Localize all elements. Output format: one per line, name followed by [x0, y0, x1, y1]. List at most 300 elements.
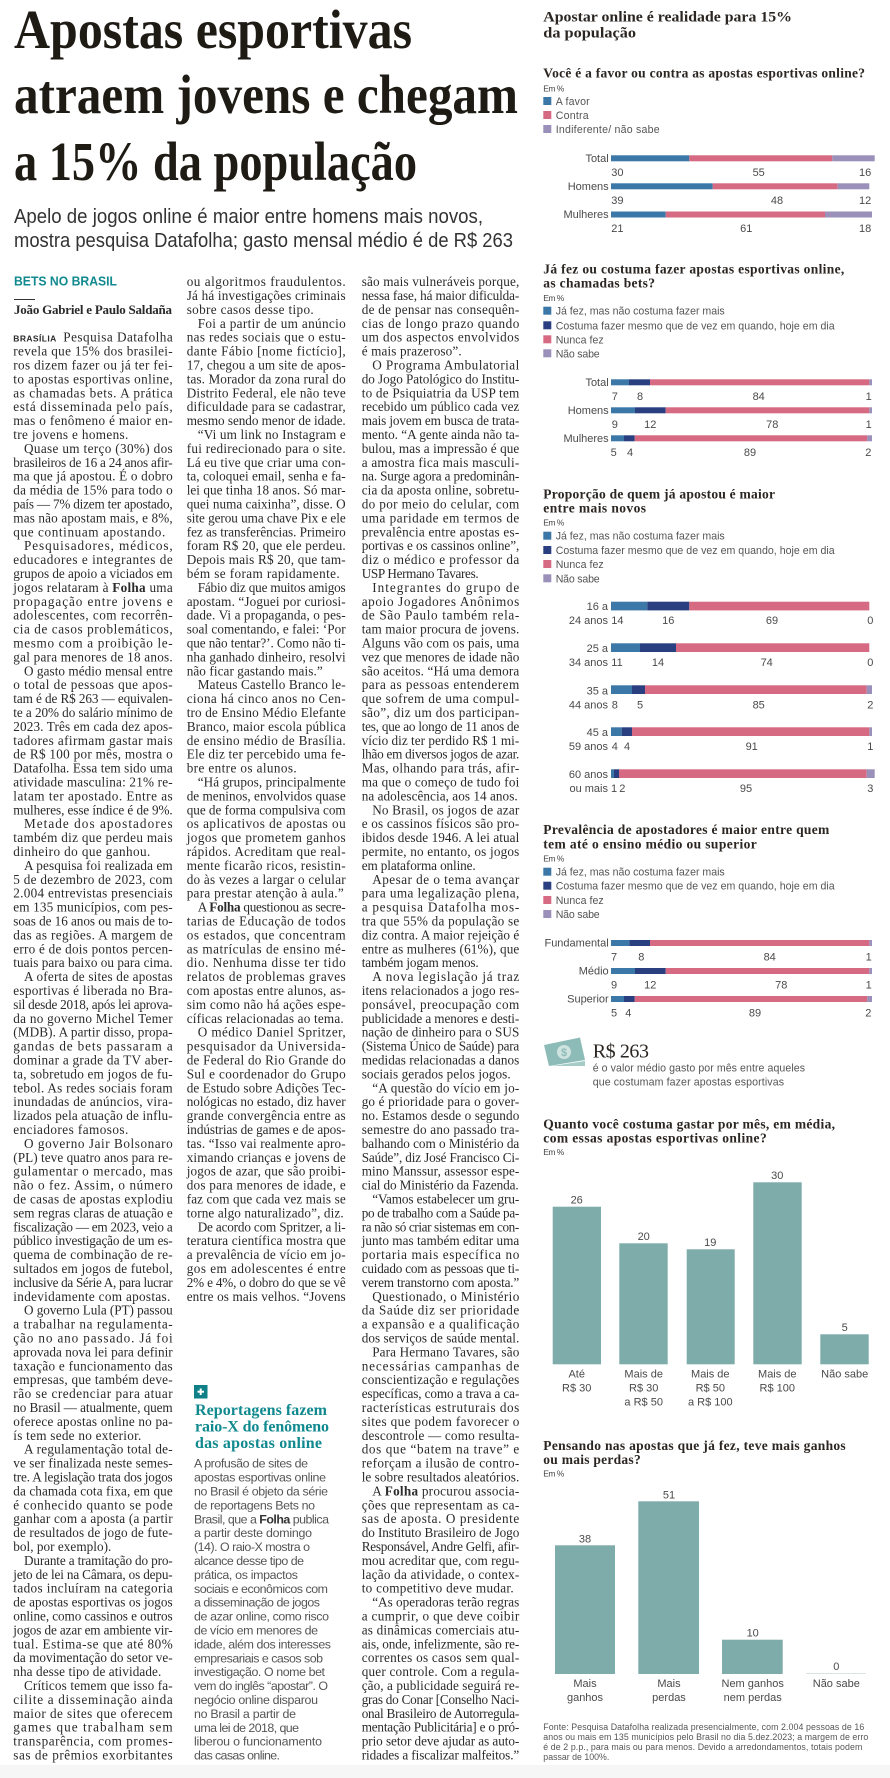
chart heading: Você é a favor ou contra as apostas esportivas online?	[543, 66, 865, 81]
stacked bars: 60 anos	[569, 769, 608, 781]
stacked bars: 48	[771, 195, 783, 207]
box text: das casas online.	[194, 1749, 280, 1763]
chart heading: Proporção de quem já apostou é maior	[543, 486, 775, 501]
article column 2: não ficar gastando mais.”	[187, 663, 323, 678]
article column 2: ximando crianças e jovens de	[187, 1150, 346, 1165]
article column 3: Integrantes do grupo de	[372, 580, 519, 595]
legend	[543, 867, 835, 921]
source note: anos ou mais em 135 municípios pelo Brasil no dia 5.dez.2023; a margem de erro	[543, 1732, 868, 1742]
article column 2: Mateus Castello Branco le-	[198, 677, 346, 692]
stacked bars: 7	[611, 952, 617, 964]
article column 2: de meninos, envolvidos quase	[187, 788, 346, 803]
article column 3: Saúde”, diz José Francisco Ci-	[362, 1150, 519, 1165]
icon: plus square	[194, 1385, 208, 1398]
article column 3: ções que representam as ca-	[362, 1497, 519, 1512]
article column 3: uma paridade em termos de	[362, 510, 519, 525]
article column 2: mente ficarão ricos, resistin-	[187, 858, 346, 873]
article column 3: tam maior procura de jovens.	[362, 622, 519, 637]
box text	[194, 1457, 331, 1763]
stacked bars: 12	[859, 195, 871, 207]
byline: João Gabriel e Paulo Saldaña	[14, 302, 172, 317]
article column 3: No Brasil, os jogos de azar	[372, 802, 520, 817]
legend: Costuma fazer mesmo que de vez em quando, hoje em dia	[556, 881, 835, 893]
article column 3: po de trabalho com a Saúde pa-	[362, 1205, 519, 1220]
article column 3: ra não só criar sistemas em con-	[362, 1219, 519, 1234]
stacked bars: 30	[611, 167, 624, 179]
article column 3: gras do Conar [Conselho Naci-	[362, 1692, 519, 1707]
article column 2: sim como não há ações espe-	[187, 997, 346, 1012]
box text: liberou o funcionamento	[194, 1735, 322, 1749]
box text: negócio online disparou	[194, 1693, 318, 1707]
chart heading	[543, 1116, 835, 1145]
article column 2: “Há grupos, principalmente	[198, 774, 346, 790]
column bars: 30	[771, 1170, 783, 1182]
article column 1: gandas de bets passaram a	[13, 1039, 173, 1054]
axis labels: ganhos	[567, 1692, 604, 1704]
article column 1: Metade dos apostadores	[24, 816, 173, 831]
article column 3: racterísticas estruturais dos	[362, 1400, 519, 1415]
article column 3: mentação Publicitária] e o pró-	[362, 1720, 519, 1735]
stacked bars: 78	[775, 980, 787, 992]
article column 1: da chamada cota fixa, em que	[13, 1483, 173, 1498]
article column 3: também jogam menos.	[362, 955, 479, 970]
article column 3: em plataforma online.	[362, 858, 476, 873]
article column 1: Pesquisadores, médicos,	[24, 538, 173, 553]
article column 3: a expansão e a qualificação	[362, 1317, 520, 1332]
article column 2: bre entre os alunos.	[187, 761, 297, 776]
article column 3: descontrole — como resulta-	[362, 1428, 519, 1443]
axis labels: R$ 30	[629, 1383, 658, 1395]
article column 3: portivas e os cassinos online”,	[362, 538, 519, 553]
article column 1: gulamentar o mercado, mas	[13, 1164, 173, 1179]
article column 3: dos serviços de saúde mental.	[362, 1330, 519, 1346]
article column 1: em 135 municípios, com pes-	[13, 900, 173, 915]
article column 2: rápidos. Acreditam que real-	[187, 844, 346, 859]
article column 1: país — 7% dizem ter apostado,	[13, 496, 173, 512]
article column 1: jogos de azar em ambiente vir-	[12, 1622, 173, 1637]
stacked bars	[563, 153, 875, 235]
article column 3: A nova legislação já traz	[372, 969, 519, 984]
article column 1: sil desde 2018, após lei aprova-	[13, 997, 173, 1012]
article column 3: onal Brasileiro de Autorregula-	[362, 1706, 519, 1721]
title: a 15% da população	[14, 131, 417, 192]
article column 1: tuais para baixo ou para cima.	[13, 955, 173, 970]
article column 3: publicidade a menores e desti-	[362, 1011, 519, 1026]
article column 3: mento. “A gente ainda não ta-	[362, 427, 519, 442]
article column 1: latam ter apostado. Entre as	[13, 788, 173, 803]
article column 1: de apostas esportivas os jogos	[13, 1595, 173, 1610]
legend: Contra	[556, 110, 589, 122]
article column 1: de R$ 100 por mês, mostra o	[13, 747, 173, 762]
article column 2: ou algoritmos fraudulentos.	[187, 274, 346, 289]
article column 3: cia da aposta online, sobretu-	[362, 483, 519, 498]
legend: Costuma fazer mesmo que de vez em quando, hoje em dia	[556, 320, 835, 332]
axis labels: R$ 30	[562, 1383, 591, 1395]
subtitle: mostra pesquisa Datafolha; gasto mensal médio é de R$ 263	[14, 230, 513, 252]
stacked bars: 2	[619, 783, 625, 795]
article column 3: bulou, mas a impressão é que	[362, 441, 519, 456]
article column 2: nológicas no estado, diz haver	[187, 1094, 346, 1109]
article column 3: reforçam a ilusão de contro-	[362, 1456, 519, 1471]
box text: de vício em menores de	[194, 1624, 318, 1638]
article column 1: O gasto médio mensal entre	[24, 663, 173, 678]
article column 1: online, como cassinos e outros	[13, 1608, 173, 1624]
stacked bars: Homens	[568, 405, 609, 417]
article column 2: O médico Daniel Spritzer,	[198, 1025, 346, 1040]
article column 2: fui redirecionado para o site.	[187, 441, 346, 456]
stacked bars: 24 anos	[569, 615, 608, 627]
chart: a favor ou contra	[543, 66, 875, 235]
article column 3: lação da atividade, o contex-	[362, 1567, 519, 1582]
article column 2: jogos que prometem ganhos	[186, 830, 346, 845]
stacked bars	[544, 938, 872, 1020]
article column 1: ta, sobretudo em jogos de fu-	[13, 1066, 173, 1081]
article column 3: “As operadoras terão regras	[372, 1595, 519, 1610]
article column 2: soal comentando, e falei: ‘Por	[187, 622, 346, 637]
article column 1: dominar a grade da TV aber-	[13, 1052, 173, 1068]
stacked bars: Homens	[568, 181, 609, 193]
article column 3: ais, onde, infelizmente, são re-	[362, 1636, 519, 1651]
stacked bars: 74	[761, 657, 773, 669]
article column 1: oferece apostas online no pa-	[13, 1414, 173, 1429]
article column 2: Já há investigações criminais	[187, 288, 346, 303]
column bars	[555, 1489, 866, 1674]
article column 3: são aceitos. “Há uma demora	[362, 663, 519, 678]
article column 1: que continuam apostando.	[13, 524, 165, 539]
article column 1: ve ser finalizada neste semes-	[13, 1456, 173, 1471]
legend: Costuma fazer mesmo que de vez em quando, hoje em dia	[556, 545, 835, 557]
article column 3: a amostra fica mais masculi-	[362, 455, 519, 470]
chart: gasto mensal: Em %	[543, 1147, 565, 1157]
article column 1: quema de combinação de re-	[13, 1247, 173, 1262]
article column 1: A pesquisa foi realizada em	[24, 858, 173, 873]
article column 1: mas não apostam mais, e 8%,	[13, 510, 173, 525]
article column 3: cuidado com as pessoas que ti-	[362, 1261, 519, 1276]
chart: ganhos ou perdas	[543, 1438, 866, 1704]
article column 1: (MDB). A partir disso, propa-	[13, 1025, 173, 1040]
article column 3: Mas, olhando para trás, afir-	[362, 761, 519, 776]
article column 1: a trabalhar na regulamenta-	[13, 1317, 173, 1332]
article column 1	[12, 330, 173, 1763]
stacked bars: 1	[866, 980, 872, 992]
article column 1: 2023. Três em cada dez apos-	[13, 719, 173, 734]
article column 1: ma que já apostou. É o dobro	[13, 469, 173, 484]
legend: Não sabe	[556, 573, 600, 585]
article column 1: BRASÍLIA	[13, 334, 56, 344]
article column 2: ta, coloquei email, senha e fa-	[187, 469, 346, 484]
stacked bars: 91	[746, 741, 758, 753]
box heading: Reportagens fazem	[195, 1402, 328, 1419]
article column 2: indústrias de games e de apos-	[187, 1122, 346, 1137]
article column 2: bém se foram rapidamente.	[187, 566, 340, 581]
article column 1: Críticos temem que isso fa-	[24, 1678, 173, 1693]
article column 1: A oferta de sites de apostas	[24, 969, 173, 984]
article column 3	[361, 274, 520, 1763]
article column 1: revela que 15% dos brasilei-	[13, 344, 173, 359]
axis labels: a R$ 50	[624, 1397, 663, 1409]
article column 2: pesquisador da Universida-	[187, 1039, 346, 1054]
article column 3: necessárias campanhas de	[362, 1358, 519, 1373]
stacked bars: 1	[611, 783, 617, 795]
box text: a disseminação de jogos	[194, 1596, 320, 1610]
article column 2: ciona há cinco anos no Cen-	[187, 691, 346, 706]
article column 1: 2.004 entrevistas presenciais	[13, 886, 173, 901]
chart: por escolaridade	[543, 822, 872, 1020]
box text: idade, além dos interesses	[194, 1637, 331, 1651]
article column 3: “A questão do vício em jo-	[372, 1080, 519, 1095]
article column 3: ponsável, preocupação com	[362, 997, 520, 1012]
stacked bars: 1	[867, 741, 873, 753]
article column 1: as chamadas bets. A prática	[13, 385, 173, 400]
stacked bars: 2	[867, 700, 873, 712]
article column 1: sultados em jogos de futebol,	[13, 1261, 173, 1276]
article column 1: mulheres, esse índice é de 9%.	[13, 802, 173, 817]
graphic main heading	[543, 10, 792, 42]
article column 3: na. Surge agora a predominân-	[362, 469, 519, 484]
article column 3: do Jogo Patológico do Institu-	[362, 371, 519, 386]
article column 2: foram R$ 20, que ele perdeu.	[187, 538, 346, 553]
article column 1: não o fez. Assim, o número	[13, 1178, 173, 1193]
stacked bars	[569, 601, 875, 795]
chart heading	[543, 822, 830, 851]
box text: A profusão de sites de	[194, 1457, 308, 1471]
stacked bars: 44 anos	[569, 700, 608, 712]
article column 2: para prestar atenção à aula.”	[187, 886, 344, 901]
article column 2: Foi a partir de um anúncio	[198, 316, 346, 331]
axis labels: Mais de	[758, 1369, 797, 1381]
article column 2: as matrículas de ensino mé-	[187, 941, 346, 956]
article column 1: tadores afirmam gastar mais	[13, 733, 173, 748]
graphic main heading: Apostar online é realidade para 15%	[543, 10, 792, 26]
box heading: raio-X do fenômeno	[195, 1419, 329, 1436]
article column 2: apostam. “Joguei por curiosi-	[187, 594, 346, 609]
stacked bars	[563, 377, 872, 459]
article column 1: dinheiro do que ganhou.	[13, 844, 150, 859]
article column 1: (PL) teve quatro anos para re-	[13, 1150, 173, 1165]
article column 1: ís tem sede no exterior.	[13, 1428, 141, 1443]
article column 3: sociais gerados pelos jogos.	[362, 1066, 511, 1081]
column bars: 20	[638, 1231, 650, 1243]
stacked bars: Mulheres	[563, 209, 609, 221]
article column 1: maior de sites que oferecem	[13, 1706, 173, 1721]
article column 1: 5 de dezembro de 2023, com	[13, 872, 173, 887]
article column 3: do Instituto Brasileiro de Jogo	[362, 1525, 520, 1540]
article column 3: para as pessoas entenderem	[362, 677, 520, 692]
title	[14, 0, 518, 192]
article column 2: tarias de Educação de todos	[187, 914, 346, 928]
article column 1: gal para menores de 18 anos.	[13, 649, 173, 664]
article column 1: inundadas de anúncios, vira-	[13, 1094, 173, 1109]
article column 3: prevalência entre apostas es-	[362, 524, 519, 539]
stacked bars: 1	[866, 391, 872, 403]
article column 2: de Federal do Rio Grande do	[187, 1052, 346, 1068]
article column 2: dio. Nenhuma disse ter tido	[187, 955, 346, 970]
box heading	[195, 1402, 329, 1452]
stacked bars: 59 anos	[569, 741, 608, 753]
article column 1: tam é de R$ 263 — equivalen-	[13, 691, 173, 706]
article column 3: le sobre resultados aleatórios.	[362, 1470, 519, 1484]
source note: é de 2 p.p., para mais ou para menos. Devido a arredondamentos, totais podem	[543, 1742, 862, 1752]
article column 1: Quase um terço (30%) dos	[24, 441, 173, 456]
panel: related box	[194, 1385, 331, 1763]
article column 2: do às vezes a largar o celular	[187, 872, 346, 887]
article column 3: semestre do ano passado tra-	[362, 1122, 519, 1137]
article column 3: A Folha procurou associa-	[372, 1483, 519, 1498]
article column 2: Sul e coordenador do Grupo	[187, 1066, 346, 1081]
axis labels: Mais de	[624, 1369, 663, 1381]
box text: no Brasil a partir de	[194, 1707, 296, 1721]
article column 3: tes, que ao longo de 11 anos de	[362, 719, 519, 734]
stacked bars: 2	[865, 447, 871, 459]
callout: R$ 263: que costumam fazer apostas esportivas	[593, 1077, 784, 1089]
article column 1: tre jovens e homens.	[13, 427, 128, 442]
article column 3: de de pensar nas consequên-	[362, 302, 519, 317]
stacked bars: 0	[867, 657, 873, 669]
article column 1: sem regras claras de atuação e	[13, 1205, 173, 1220]
article column 3: mais jovem em busca de trata-	[362, 413, 519, 428]
axis labels: Mais de	[691, 1369, 730, 1381]
article column 3: junto mas também editar uma	[361, 1233, 519, 1248]
article column 3: Para Hermano Tavares, são	[372, 1344, 520, 1359]
box text: investigação. O nome bet	[194, 1665, 326, 1679]
article column 3: vez que menores de idade não	[362, 649, 520, 664]
article column 3: são mais vulneráveis porque,	[362, 274, 519, 289]
article column 2: Lá eu tive que criar uma con-	[187, 455, 346, 470]
article column 1: brasileiros de 16 a 24 anos afir-	[13, 455, 173, 470]
stacked bars: Superior	[567, 994, 609, 1006]
stacked bars: 4	[625, 1008, 631, 1020]
stacked bars: 16 a	[587, 601, 609, 613]
article column 2: Depois mais R$ 20, que tam-	[187, 552, 346, 567]
stacked bars: Médio	[579, 966, 609, 978]
legend	[543, 306, 835, 360]
article column 2: tas. Morador da zona rural do	[187, 371, 346, 386]
box heading: das apostas online	[195, 1435, 322, 1452]
article column 2: teratura científica mostra que	[187, 1233, 346, 1248]
stacked bars: 5	[611, 1008, 617, 1020]
article column 1: Pesquisa Datafolha	[63, 330, 173, 345]
article column 2: cíficas relacionadas ao tema.	[187, 1011, 344, 1026]
article column 2: dante Fábio [nome fictício],	[187, 344, 346, 359]
article column 3: portaria mais específica no	[362, 1247, 520, 1262]
stacked bars: ou mais	[569, 783, 608, 795]
article column 2: dos para menores de idade, e	[187, 1178, 346, 1193]
article column 2: de Estudo sobre Adições Tec-	[187, 1080, 346, 1095]
article column 2: Distrito Federal, ele não teve	[187, 385, 346, 400]
stacked bars: 34 anos	[569, 657, 608, 669]
article column 3: Alguns vão com os pais, uma	[362, 636, 519, 650]
stacked bars: 3	[867, 783, 873, 795]
axis labels: Não sabe	[821, 1369, 868, 1381]
article column 2: “Vi um link no Instagram e	[198, 427, 346, 442]
article column 3: nação de dinheiro para o SUS	[362, 1025, 519, 1040]
article column 1: Datafolha. Essa tem sido uma	[13, 761, 173, 776]
article column 1: soas de 16 anos ou mais de to-	[13, 914, 173, 928]
legend: Nunca fez	[556, 559, 604, 571]
article column 1: tual. Estima-se que até 80%	[13, 1636, 173, 1651]
article column 1: ganhar com a aposta (a partir	[13, 1511, 173, 1526]
article column 1: educadores e integrantes de	[13, 552, 173, 567]
subtitle: Apelo de jogos online é maior entre homens mais novos,	[14, 206, 483, 228]
article column 2: jogos de azar, que são proibi-	[186, 1164, 346, 1179]
stacked bars: 1	[866, 419, 872, 431]
box text: (14). O raio-X mostra o	[194, 1540, 310, 1554]
article column 3: específicas, como a trava a ca-	[362, 1386, 519, 1401]
stacked bars: 5	[637, 700, 643, 712]
stacked bars: 25 a	[587, 643, 609, 655]
chart: ganhos ou perdas: Em %	[543, 1469, 565, 1479]
chart: por faixa etária: Em %	[543, 518, 565, 528]
section tag: BETS NO BRASIL	[14, 274, 117, 289]
article column 3: ibidos desde 1946. A lei atual	[362, 830, 520, 845]
stacked bars: 16	[859, 167, 871, 179]
box text: apostas esportivas online	[194, 1471, 326, 1485]
chart: gasto mensal	[543, 1116, 869, 1409]
article column 1: das as regiões. A margem de	[13, 927, 173, 942]
box text: uma lei de 2018, que	[194, 1721, 299, 1735]
axis labels: nem perdas	[724, 1692, 782, 1704]
box text: Brasil, que a Folha publica	[194, 1512, 329, 1526]
article column 3: de São Paulo também rela-	[362, 608, 519, 623]
article column 3: conscientização e regulações	[362, 1372, 519, 1387]
article column 2: mesmo sendo menor de idade.	[187, 413, 346, 428]
legend: Indiferente/ não sabe	[556, 124, 660, 136]
article column 2: entre os mais velhos. “Jovens	[187, 1289, 346, 1304]
article column 3: ma que o começo de tudo foi	[362, 774, 520, 790]
article column 3: mou acreditar que, com regu-	[362, 1553, 519, 1568]
article column 2: que não tentar?’. Como não ti-	[187, 636, 346, 650]
article column 3: to de Psiquiatria da USP tem	[362, 385, 520, 400]
title: Apostas esportivas	[14, 0, 412, 60]
article column 1: erro é de dois pontos percen-	[13, 941, 173, 956]
axis labels: Mais	[573, 1678, 597, 1690]
box text: a partir deste domingo	[194, 1526, 312, 1540]
legend: Não sabe	[556, 348, 600, 360]
legend	[543, 531, 835, 585]
article column 1: propagação entre jovens e	[13, 594, 173, 609]
article column 3: USP Hermano Tavares.	[362, 566, 479, 581]
article column 2: Ele diz ter percebido uma fe-	[187, 747, 346, 762]
article column 2: que de forma compulsiva com	[187, 802, 346, 817]
article column 1: atividade masculina: 21% re-	[13, 774, 173, 790]
article column 1: está disseminada pelo país,	[13, 399, 173, 414]
callout: R$ 263: é o valor médio gasto por mês entre aqueles	[593, 1063, 805, 1075]
stacked bars: 39	[611, 195, 624, 207]
article column 3: recebido um público cada vez	[362, 399, 519, 414]
axis labels: Não sabe	[813, 1678, 860, 1690]
legend: Já fez, mas não costuma fazer mais	[556, 306, 725, 318]
article column 2: Fábio diz que muitos amigos	[198, 580, 346, 595]
article column 1: mas o fenômeno é maior en-	[13, 413, 173, 428]
article column 2: os estados, que concentram	[187, 927, 346, 942]
stacked bars: Fundamental	[544, 938, 609, 950]
stacked bars: 1	[866, 952, 872, 964]
article column 1: da média de 15% para todo o	[13, 483, 173, 498]
article column 1: sas de prêmios exorbitantes	[13, 1748, 173, 1762]
box text: empresariais e casos sob	[194, 1651, 323, 1665]
article column 3: no. Estamos desde o segundo	[362, 1108, 520, 1123]
article column 1: aprovada nova lei para definir	[13, 1344, 173, 1359]
article column 1: O governo Lula (PT) passou	[24, 1303, 173, 1318]
article column 1: jeto de lei na Câmara, os depu-	[12, 1567, 173, 1582]
article column 3: ridades a fiscalizar malfeitos.”	[362, 1748, 519, 1762]
article column 1: taxação e funcionamento das	[13, 1358, 173, 1373]
article column 2: 17, chegou a um site de apos-	[187, 358, 346, 372]
box text: de reportagens Bets no	[194, 1498, 315, 1512]
stacked bars: 45 a	[587, 727, 609, 739]
box text: vem do inglês “apostar”. O	[194, 1679, 328, 1693]
column bars: 5	[842, 1322, 848, 1334]
